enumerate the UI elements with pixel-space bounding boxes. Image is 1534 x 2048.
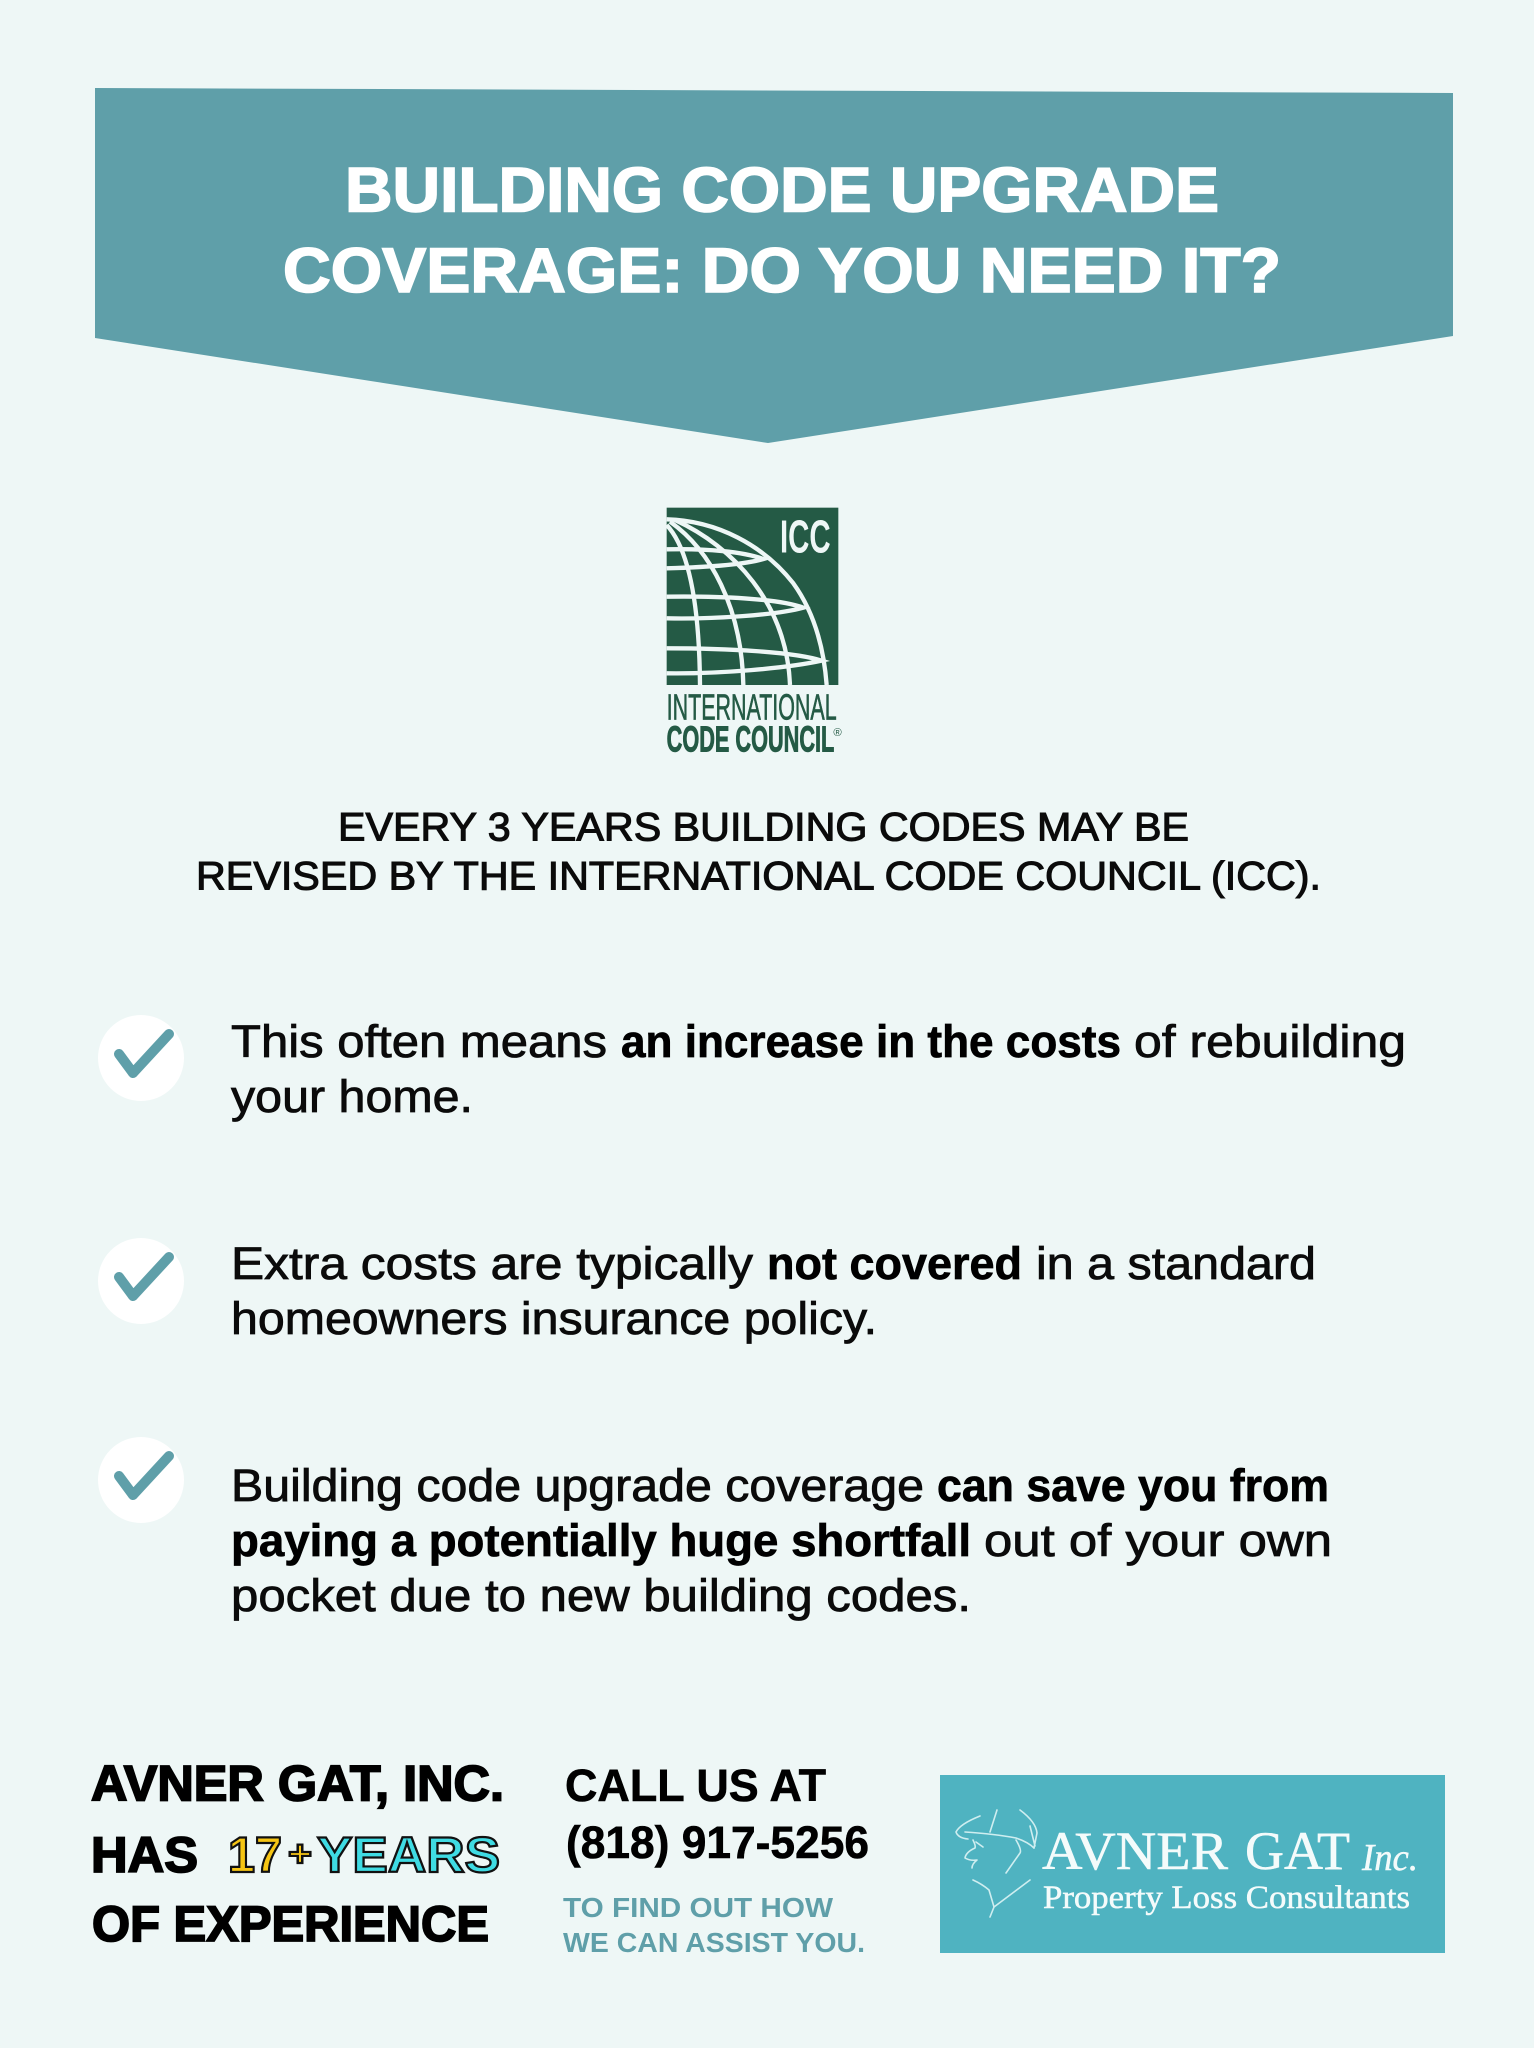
text: not covered (767, 1238, 1022, 1289)
17+ years highlight (228, 1827, 500, 1883)
company name: GAT (1245, 1821, 1350, 1881)
logo square (667, 508, 838, 685)
subheading: REVISED BY THE INTERNATIONAL CODE COUNCIL (ICC). (196, 854, 1321, 898)
subheading: EVERY 3 YEARS BUILDING CODES MAY BE (338, 806, 1189, 850)
icon: International Code Council logo: CODE COUNCIL (667, 719, 834, 760)
text (231, 1238, 1316, 1344)
text: homeowners insurance policy. (231, 1293, 877, 1344)
text: Building code upgrade coverage (231, 1460, 924, 1511)
company name: AVNER (1042, 1821, 1228, 1881)
text (231, 1016, 1406, 1122)
icon: International Code Council logo: ® (833, 727, 842, 739)
text: an increase in the costs (621, 1016, 1121, 1067)
experience statement: AVNER GAT, INC. (91, 1756, 504, 1812)
text (231, 1460, 1332, 1621)
Avner Gat logo panel (940, 1775, 1445, 1953)
check item 2 (98, 1238, 1316, 1344)
experience statement (91, 1756, 504, 1952)
title: COVERAGE: DO YOU NEED IT? (283, 236, 1281, 306)
experience statement: OF EXPERIENCE (92, 1896, 489, 1952)
icon: check circle (98, 1238, 184, 1324)
company tagline: Property Loss Consultants (1043, 1880, 1410, 1916)
text: Extra costs are typically (231, 1238, 754, 1289)
call to action note: TO FIND OUT HOW (563, 1892, 834, 1923)
check item 1 (98, 1015, 1406, 1122)
17+ years highlight: YEARS (317, 1827, 500, 1883)
subheading (196, 806, 1321, 898)
text: This often means (231, 1016, 607, 1067)
icon: check circle (98, 1015, 184, 1101)
icon: International Code Council logo (667, 508, 842, 760)
experience statement: HAS (91, 1827, 198, 1883)
logo wordmark: INTERNATIONAL (667, 686, 837, 727)
check item 3 (98, 1437, 1332, 1621)
text: pocket due to new building codes. (231, 1570, 971, 1621)
text: paying a potentially huge shortfall (231, 1515, 971, 1566)
call to action note: WE CAN ASSIST YOU. (563, 1927, 865, 1958)
banner shape (95, 88, 1453, 443)
text: your home. (231, 1071, 473, 1122)
call to action note (563, 1892, 865, 1958)
title (283, 156, 1281, 306)
call to action (563, 1760, 869, 1958)
globe grid (667, 519, 827, 685)
text: out of your own (984, 1515, 1332, 1566)
panel background (940, 1775, 1445, 1953)
ICC initials: ICC (780, 510, 831, 562)
icon: man in cap sketch (956, 1810, 1037, 1917)
17+ years highlight: + (288, 1833, 312, 1874)
call to action: (818) 917-5256 (566, 1817, 869, 1868)
17+ years highlight: 17 (228, 1827, 282, 1883)
text: can save you from (937, 1460, 1329, 1511)
text: in a standard (1036, 1238, 1316, 1289)
company name (1042, 1821, 1418, 1881)
title: BUILDING CODE UPGRADE (345, 156, 1219, 226)
text: of rebuilding (1134, 1016, 1406, 1067)
call to action: CALL US AT (565, 1760, 826, 1811)
title banner (95, 88, 1453, 443)
icon: check circle (98, 1437, 184, 1523)
company name: Inc. (1361, 1837, 1418, 1879)
